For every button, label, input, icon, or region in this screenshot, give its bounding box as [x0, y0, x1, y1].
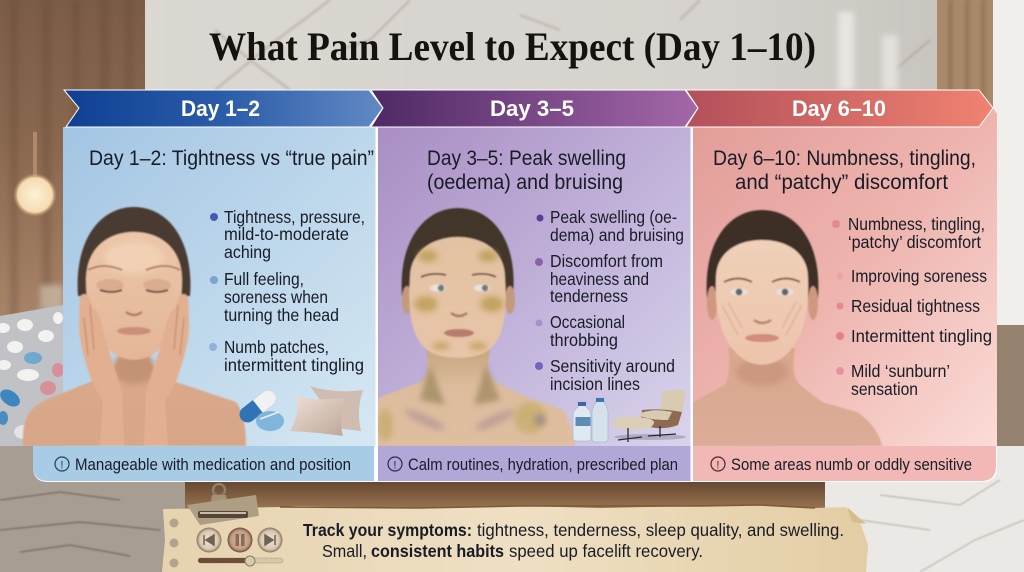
footer strip	[693, 446, 996, 481]
icon: water bottles	[573, 398, 608, 442]
bullet list: Numb patches,	[224, 337, 329, 357]
footer strip	[378, 446, 691, 481]
bullet list	[535, 207, 684, 394]
bullet list	[832, 214, 992, 399]
chevron header	[686, 90, 993, 127]
tip text: Track your symptoms:	[303, 520, 472, 540]
footer note: !	[716, 460, 719, 472]
bullet list: Intermittent tingling	[851, 326, 992, 346]
header label: Day 1–2	[181, 96, 260, 121]
header label: Day 3–5	[490, 96, 574, 121]
portrait: swollen bruised face	[370, 208, 575, 446]
main panel frame	[33, 127, 997, 482]
icon: capsule and tablet	[236, 387, 284, 431]
section heading: and “patchy” discomfort	[735, 171, 948, 194]
title: What Pain Level to Expect (Day 1–10)	[209, 24, 816, 69]
tip text: consistent habits	[371, 541, 504, 561]
section heading	[713, 147, 976, 194]
column dividers	[376, 127, 693, 482]
portrait: calm recovering face	[684, 210, 882, 446]
panel: Day 3–5	[370, 90, 698, 481]
panel: Day 6–10	[684, 90, 997, 481]
section heading	[427, 147, 626, 194]
bullet list: Residual tightness	[851, 296, 980, 316]
panel: Day 1–2	[23, 90, 383, 481]
bullet list: Occasional	[550, 312, 625, 332]
footer note: Calm routines, hydration, prescribed plan	[408, 455, 678, 474]
bullet list: Numbness, tingling,	[848, 214, 985, 234]
bullet list: incision lines	[550, 374, 640, 394]
tip text: tightness, tenderness, sleep quality, and swelling.	[477, 520, 844, 540]
bullet list: Tightness, pressure,	[224, 207, 365, 227]
torn paper note	[162, 484, 868, 572]
footer strip	[33, 446, 374, 481]
notebook holes	[170, 518, 178, 568]
paper sheet	[162, 505, 868, 572]
icon: binder clip	[187, 484, 259, 525]
section heading: Day 3–5: Peak swelling	[427, 147, 626, 170]
bullet list: ‘patchy’ discomfort	[848, 232, 981, 252]
icon: lounge chair	[612, 390, 686, 442]
bullet list: intermittent tingling	[224, 355, 364, 375]
bullet list: aching	[224, 242, 271, 262]
section heading: (oedema) and bruising	[427, 171, 623, 194]
bullet list: heaviness and	[550, 269, 649, 289]
bullet list: sensation	[851, 379, 918, 399]
portrait: woman holding face with eyes closed	[23, 207, 246, 446]
footer note: Some areas numb or oddly sensitive	[731, 455, 972, 474]
bullet list: throbbing	[550, 330, 618, 350]
bullet list: mild-to-moderate	[224, 224, 349, 244]
bullet list: Sensitivity around	[550, 356, 675, 376]
bullet list: Full feeling,	[224, 269, 304, 289]
header label: Day 6–10	[792, 96, 886, 121]
bullet list: dema) and bruising	[550, 225, 684, 245]
media control buttons	[196, 528, 282, 552]
section heading: Day 6–10: Numbness, tingling,	[713, 147, 976, 170]
footer note: !	[60, 460, 63, 472]
progress slider	[198, 556, 283, 566]
section heading: Day 1–2: Tightness vs “true pain”	[89, 147, 374, 170]
tip text: speed up facelift recovery.	[509, 541, 703, 561]
bullet list: tenderness	[550, 286, 628, 306]
icon: satin pillows	[290, 386, 363, 436]
bullet list: turning the head	[224, 305, 339, 325]
bullet list: Discomfort from	[550, 251, 663, 271]
footer note: !	[393, 460, 396, 472]
footer note: Manageable with medication and position	[75, 455, 351, 474]
bullet list	[209, 207, 365, 375]
chevron header	[64, 90, 383, 127]
tip text: Small,	[322, 541, 367, 561]
blister pack of pills	[0, 305, 64, 446]
tip text	[303, 520, 844, 561]
bullet list: Mild ‘sunburn’	[851, 361, 950, 381]
bullet list: Improving soreness	[851, 266, 987, 286]
bullet list: soreness when	[224, 287, 328, 307]
panel background	[378, 127, 691, 446]
panel background	[63, 127, 376, 446]
panel background	[693, 108, 997, 446]
chevron header	[371, 90, 698, 127]
bullet list: Peak swelling (oe-	[550, 207, 677, 227]
